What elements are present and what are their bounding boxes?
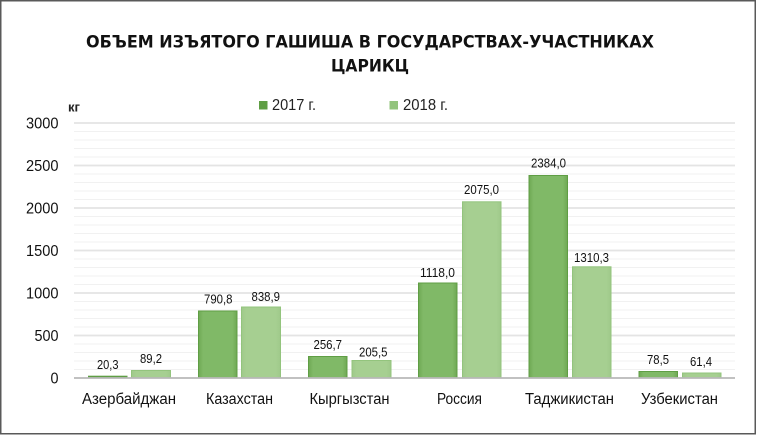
- data labels: 89,2: [140, 351, 162, 366]
- y axis labels: 0: [50, 370, 59, 388]
- data labels: 256,7: [314, 337, 342, 352]
- y axis unit: кг: [68, 100, 81, 114]
- bars: Казахстан: [198, 307, 280, 378]
- category labels: Кыргызстан: [310, 391, 390, 408]
- data labels: 20,3: [97, 357, 118, 372]
- y axis labels: 1500: [26, 243, 59, 260]
- legend: 2017 г.: [272, 97, 316, 114]
- category labels: Казахстан: [206, 391, 273, 408]
- y axis labels: 1000: [26, 286, 59, 302]
- bars: Таджикистан: [529, 176, 611, 378]
- y axis labels: 500: [34, 328, 59, 345]
- category labels: Узбекистан: [641, 391, 718, 408]
- data labels: 2384,0: [531, 156, 566, 170]
- data labels: 1310,3: [574, 250, 609, 265]
- category labels: Азербайджан: [82, 391, 176, 408]
- data labels: 61,4: [690, 354, 712, 369]
- title: [86, 32, 654, 76]
- y axis labels: 3000: [26, 116, 59, 132]
- data labels: 790,8: [204, 292, 232, 306]
- bars: Узбекистан: [639, 372, 721, 378]
- y axis labels: 2000: [26, 200, 59, 218]
- legend: [259, 97, 448, 114]
- category labels: Таджикистан: [525, 391, 614, 408]
- data labels: 2075,0: [464, 182, 499, 197]
- title: ЦАРИКЦ: [331, 56, 409, 76]
- data labels: 838,9: [252, 289, 280, 304]
- bars: Кыргызстан: [308, 356, 391, 378]
- category labels: Россия: [437, 391, 482, 408]
- bars: Россия: [418, 202, 501, 378]
- data labels: 205,5: [359, 344, 388, 360]
- y axis labels: 2500: [26, 158, 59, 175]
- legend: 2018 г.: [403, 97, 448, 114]
- bars: Азербайджан: [88, 370, 170, 378]
- title: ОБЪЕМ ИЗЪЯТОГО ГАШИША В ГОСУДАРСТВАХ-УЧАСТНИКАХ: [86, 32, 654, 52]
- data labels: 1118,0: [420, 265, 455, 280]
- category labels: [82, 391, 718, 408]
- y axis labels: [26, 116, 59, 388]
- data labels: 78,5: [647, 352, 669, 367]
- data labels: [97, 156, 712, 372]
